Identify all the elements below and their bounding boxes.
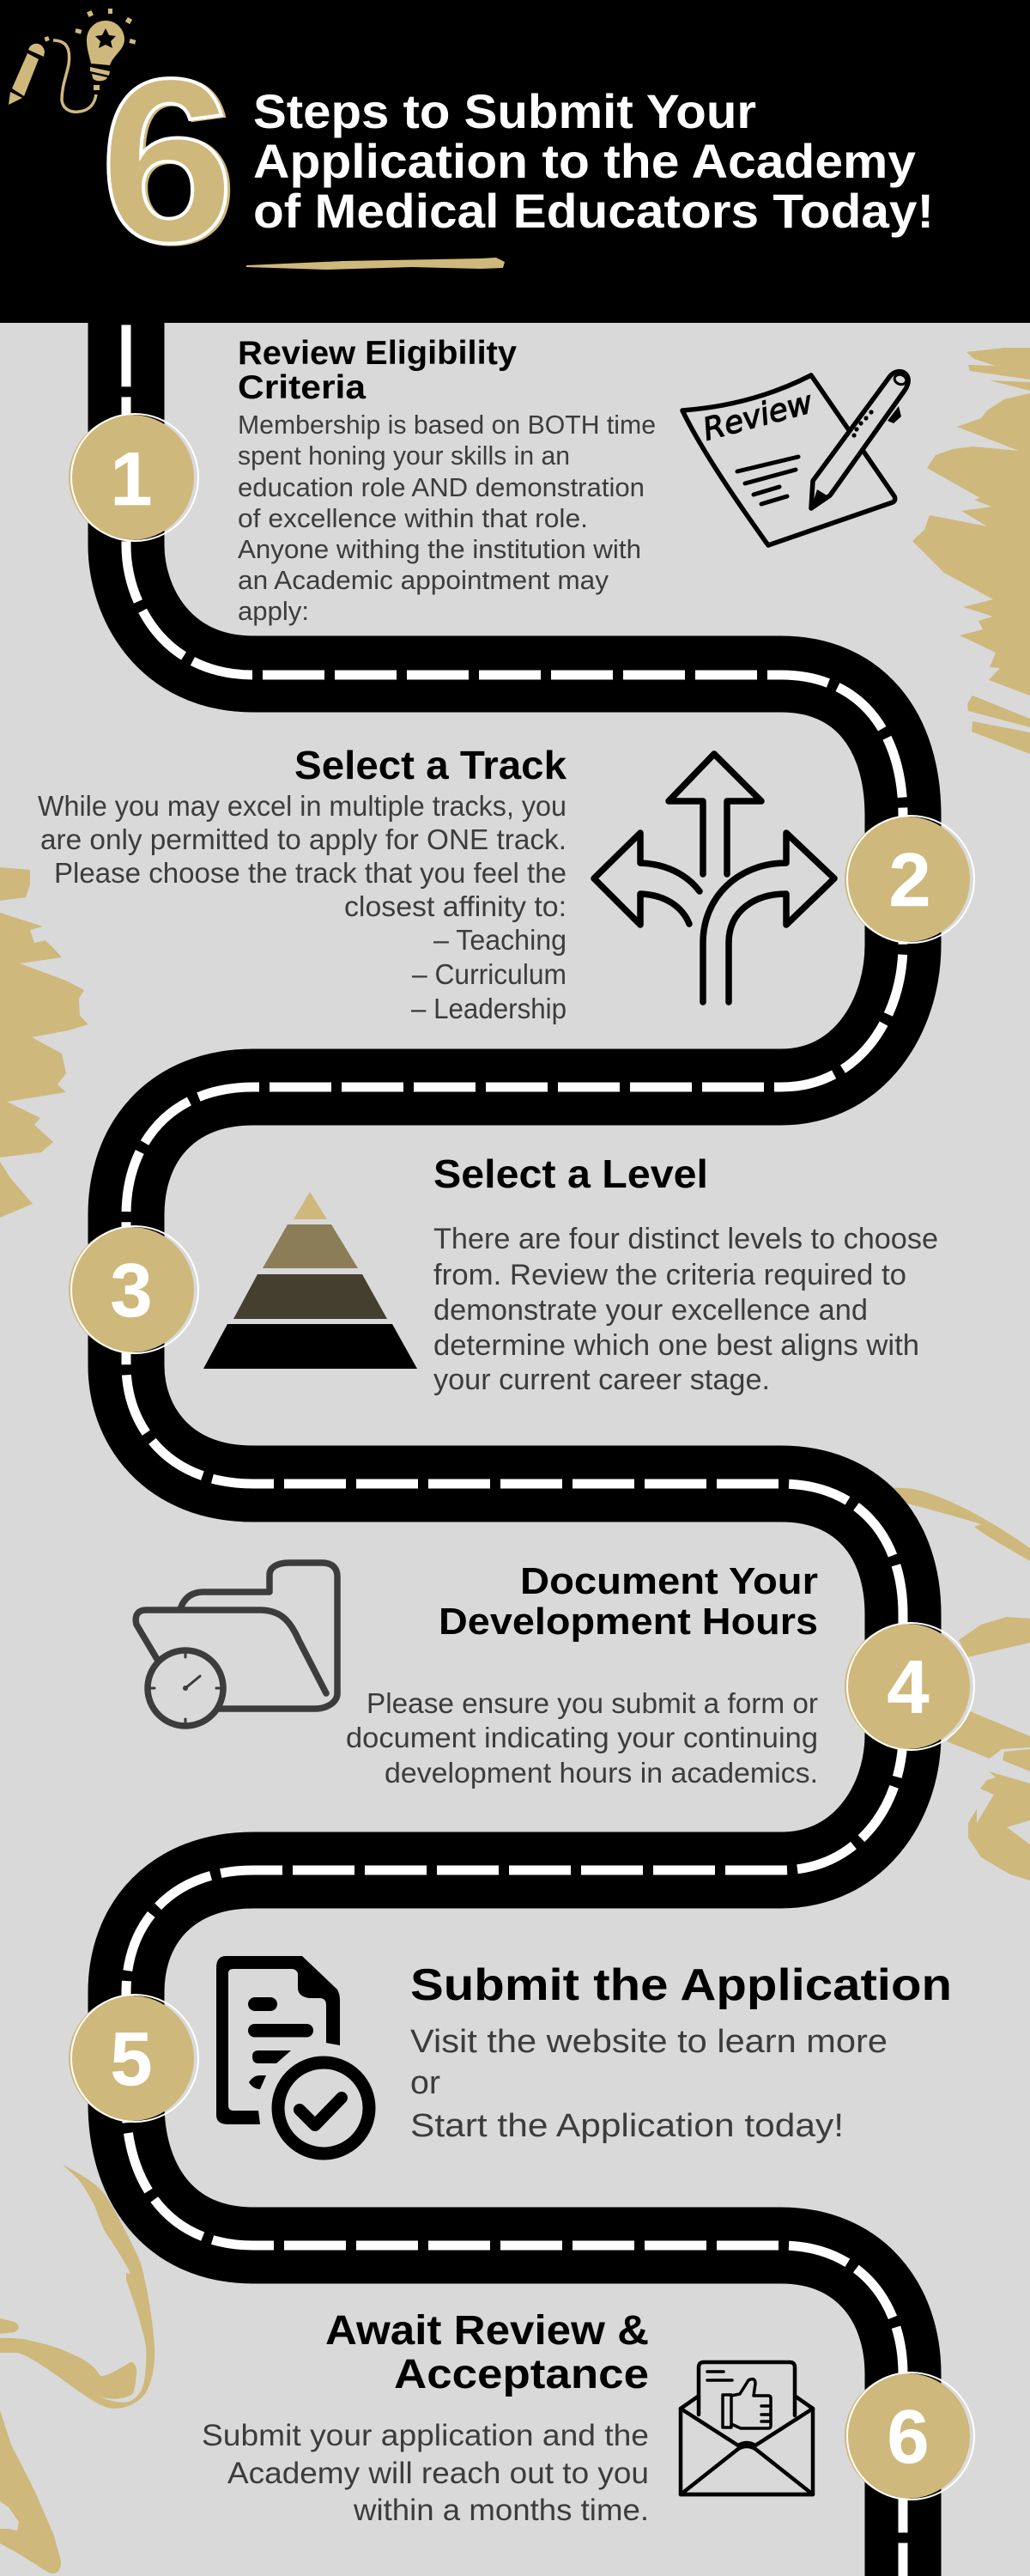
body text: demonstrate your excellence and xyxy=(433,1294,868,1327)
gold brush stroke: lower left xyxy=(0,2165,154,2573)
icon: pencil xyxy=(9,44,45,105)
body text xyxy=(433,1223,938,1396)
body text: Visit the website to learn more xyxy=(410,2024,888,2060)
body text: Membership is based on BOTH time xyxy=(238,410,656,440)
badge 5: 5 xyxy=(111,2016,152,2101)
body text: – Teaching xyxy=(433,924,566,956)
badge 4: 4 xyxy=(888,1644,930,1729)
road xyxy=(126,323,903,2576)
heading: review eligibility criteria: Criteria xyxy=(238,369,366,406)
badge 6 xyxy=(845,2372,974,2500)
body text: an Academic appointment may xyxy=(238,565,609,595)
icon: document with check mark xyxy=(216,1956,369,2154)
body text: spent honing your skills in an xyxy=(238,440,570,471)
step 6 xyxy=(202,2308,974,2527)
heading: select a level: Select a Level xyxy=(433,1151,708,1196)
heading: document your development hours: Document Your xyxy=(520,1560,818,1602)
body text: document indicating your continuing xyxy=(346,1722,818,1753)
badge 2 xyxy=(845,816,974,943)
body text: While you may excel in multiple tracks, you xyxy=(38,790,566,822)
badge 3: 3 xyxy=(111,1248,152,1333)
title underline brush xyxy=(246,258,505,270)
body text: education role AND demonstration xyxy=(238,472,645,502)
body text: are only permitted to apply for ONE track. xyxy=(40,823,566,855)
body text xyxy=(238,410,656,626)
badge 4 xyxy=(845,1623,974,1750)
body text: Please ensure you submit a form or xyxy=(367,1687,818,1719)
body text: Academy will reach out to you xyxy=(227,2457,649,2490)
step 2 xyxy=(38,743,974,1024)
step 1 xyxy=(69,335,908,626)
badge 1: 1 xyxy=(111,436,152,521)
heading: review eligibility criteria xyxy=(238,335,517,406)
body text: Submit your application and the xyxy=(202,2419,649,2452)
icon: pyramid xyxy=(203,1192,417,1369)
heading: await review and acceptance: Await Review & xyxy=(325,2308,649,2354)
body text xyxy=(410,2024,888,2144)
gold brush stroke: middle left xyxy=(0,867,88,1218)
body text: – Curriculum xyxy=(412,958,566,990)
body text: There are four distinct levels to choose xyxy=(433,1223,938,1255)
gold brush stroke: top right xyxy=(912,348,1030,754)
body text: apply: xyxy=(238,596,309,626)
heading: await review and acceptance xyxy=(325,2308,649,2397)
body text: from. Review the criteria required to xyxy=(433,1259,906,1291)
badge 6: 6 xyxy=(888,2394,929,2479)
body text: determine which one best aligns with xyxy=(433,1329,919,1362)
body text: or xyxy=(410,2065,440,2101)
icon: review paper and pen xyxy=(682,372,908,545)
body text: Anyone withing the institution with xyxy=(238,534,641,564)
body text xyxy=(346,1687,818,1789)
body text: Please choose the track that you feel the xyxy=(54,857,566,889)
big number 6: 6 xyxy=(100,30,234,291)
badge 5 xyxy=(69,1995,198,2122)
heading: review eligibility criteria: Review Eligibility xyxy=(238,335,517,372)
body text xyxy=(38,790,566,1024)
icon: three-way arrows xyxy=(594,754,834,1002)
step 3 xyxy=(69,1151,938,1396)
body text: Start the Application today! xyxy=(410,2108,844,2144)
body text xyxy=(202,2419,649,2527)
gold brush stroke: right of step 4 xyxy=(887,1488,1030,1880)
icon: lightbulb with wire xyxy=(44,9,136,112)
icon: folder with clock xyxy=(136,1563,337,1726)
big number 6: 6 xyxy=(102,31,237,292)
body text: your current career stage. xyxy=(433,1364,770,1396)
body text: of excellence within that role. xyxy=(238,503,588,533)
title xyxy=(253,84,934,238)
title: of Medical Educators Today! xyxy=(253,184,934,238)
step 4 xyxy=(136,1560,974,1789)
heading: document your development hours xyxy=(439,1560,818,1643)
icon: review paper and pen: Review xyxy=(700,385,816,448)
icon: envelope with thumbs up letter xyxy=(681,2362,813,2494)
header banner xyxy=(0,0,1030,323)
badge 2: 2 xyxy=(889,837,930,922)
heading: document your development hours: Development Hours xyxy=(439,1601,818,1643)
heading: select a track: Select a Track xyxy=(294,743,566,787)
body text: closest affinity to: xyxy=(344,890,566,922)
body text: within a months time. xyxy=(353,2494,649,2527)
badge 3 xyxy=(69,1226,198,1353)
title: Steps to Submit Your xyxy=(253,84,756,138)
heading: await review and acceptance: Acceptance xyxy=(394,2352,649,2397)
step 5 xyxy=(69,1956,952,2154)
title: Application to the Academy xyxy=(253,134,916,188)
body text: – Leadership xyxy=(411,993,566,1024)
body text: development hours in academics. xyxy=(385,1757,818,1789)
heading: submit the application: Submit the Application xyxy=(410,1960,952,2010)
badge 1 xyxy=(69,414,198,541)
